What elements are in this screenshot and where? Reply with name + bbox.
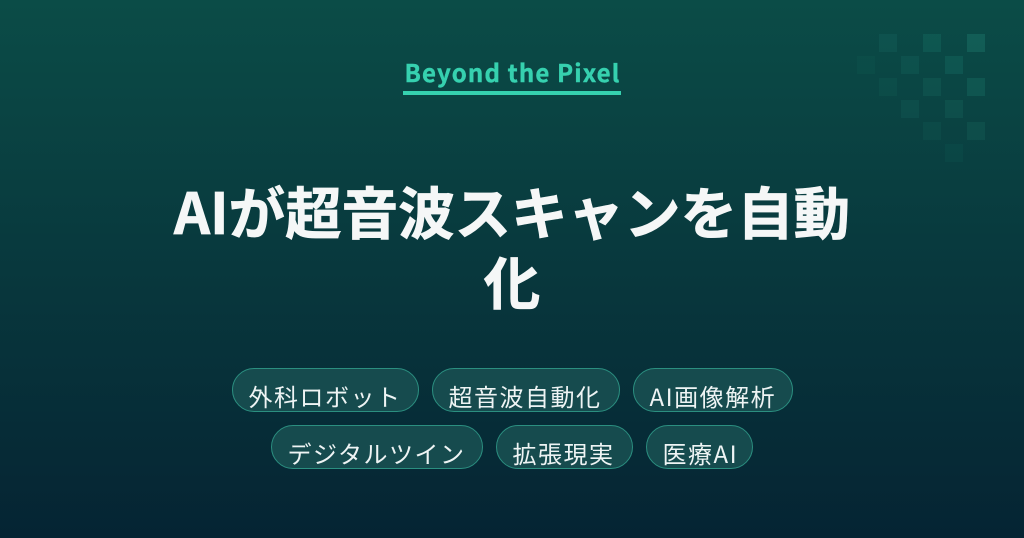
- eyebrow heading with underline: Beyond the Pixel: [405, 54, 620, 89]
- tag: augmented reality: [496, 425, 633, 469]
- title: [173, 168, 850, 320]
- title: AIが超音波スキャンを自動: [174, 168, 850, 250]
- tag: AI image analysis: [633, 368, 793, 412]
- tag: surgical robot: [232, 368, 419, 412]
- tag: augmented reality: 拡張現実: [512, 434, 614, 470]
- tag: ultrasound automation: 超音波自動化: [448, 378, 602, 412]
- tag: AI image analysis: AI画像解析: [650, 378, 776, 412]
- tag: ultrasound automation: [432, 368, 620, 412]
- icon: decorative square pattern: [879, 34, 985, 140]
- tags: [232, 368, 793, 470]
- tag: surgical robot: 外科ロボット: [248, 378, 402, 412]
- tag: digital twin: デジタルツイン: [288, 434, 466, 470]
- tag: digital twin: [271, 425, 483, 469]
- title: 化: [484, 238, 540, 320]
- tag: medical AI: 医療AI: [662, 434, 738, 470]
- tag: medical AI: [646, 425, 753, 469]
